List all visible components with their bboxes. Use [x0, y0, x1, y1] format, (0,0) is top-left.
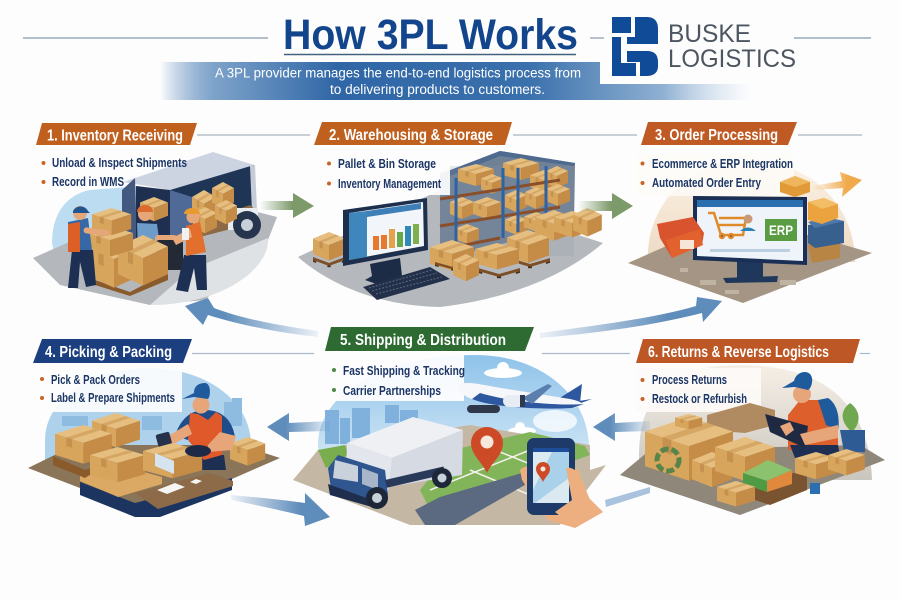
- monitor: [693, 196, 807, 283]
- bullets 2: Pallet & Bin Storage: [338, 157, 436, 171]
- scene background: [52, 186, 140, 290]
- bullets 5: [332, 364, 465, 398]
- arrow: shipping to picking: [267, 413, 330, 441]
- stacked boxes: [780, 176, 844, 263]
- logo wordmark: [668, 20, 796, 73]
- box with scanner label: [143, 443, 202, 478]
- arrow: picking to shipping: [230, 493, 330, 526]
- dome: [648, 160, 855, 262]
- pile of boxes: [645, 414, 865, 507]
- bullets 2: [327, 157, 442, 191]
- sky dome: [318, 355, 589, 470]
- bullets 1: Unload & Inspect Shipments: [52, 156, 187, 170]
- pallets and table: [80, 468, 233, 517]
- pallet stacks: [313, 208, 602, 281]
- city silhouette: [62, 398, 242, 430]
- worker: [765, 372, 840, 458]
- subtitle banner: A 3PL provider manages the end-to-end logistics process from: [215, 66, 581, 80]
- arrow: warehousing to order processing: [578, 193, 633, 219]
- text backing: [36, 368, 182, 412]
- logo mark: [612, 17, 658, 76]
- agent: [740, 214, 756, 231]
- bullets 6: Process Returns: [652, 373, 727, 387]
- worker right: [172, 208, 207, 292]
- title: How 3PL Works: [283, 11, 578, 59]
- bullets 2: Inventory Management: [338, 177, 442, 191]
- arrow: returns to shipping: [593, 413, 650, 441]
- curved arrow: shipping back to receiving: [185, 298, 318, 337]
- heading 3: [641, 122, 797, 145]
- bullets 6: [640, 373, 747, 406]
- floor: [620, 445, 885, 515]
- warehouse floor: [298, 190, 603, 307]
- gloved hand: [185, 445, 211, 457]
- logo: Buske Logistics: [612, 17, 796, 76]
- bullets 3: Ecommerce & ERP Integration: [652, 157, 793, 171]
- heading 4: [33, 339, 192, 363]
- bullets 4: Pick & Pack Orders: [51, 373, 140, 387]
- arrow: faint returns stem: [605, 487, 650, 507]
- heading 3: 3. Order Processing: [655, 127, 778, 144]
- arrow: receiving to warehousing: [260, 193, 314, 218]
- worker behind: [137, 205, 183, 270]
- panel 1: inventory receiving: [33, 152, 277, 305]
- panel 6: returns and reverse logistics: [620, 365, 885, 515]
- floor: [628, 235, 872, 303]
- dome: [45, 368, 251, 470]
- city skyline: [325, 405, 418, 444]
- heading 1: [36, 123, 197, 145]
- warehouse building: [440, 151, 575, 260]
- bullets 3: Automated Order Entry: [652, 176, 761, 190]
- location pin: [471, 427, 503, 473]
- keyboard: [363, 267, 450, 300]
- heading 1: 1. Inventory Receiving: [47, 128, 183, 144]
- worker left: [68, 206, 110, 288]
- dome: [639, 365, 872, 480]
- text backing: [322, 355, 464, 401]
- text backing: [636, 154, 794, 196]
- orange arrow: [812, 172, 862, 197]
- shopping cart: [708, 213, 746, 238]
- bullets 6: Restock or Refurbish: [652, 392, 747, 406]
- truck: [328, 417, 463, 509]
- heading 6: 6. Returns & Reverse Logistics: [648, 344, 829, 361]
- heading 5: 5. Shipping & Distribution: [340, 332, 506, 349]
- logo wordmark: BUSKE: [668, 20, 751, 48]
- heading 5: [325, 327, 534, 351]
- plant: [840, 403, 865, 452]
- truck: [122, 152, 261, 250]
- curved arrow: shipping to order processing: [540, 297, 722, 338]
- phone in hand: [520, 438, 603, 528]
- text backing: [322, 153, 450, 195]
- heading 6: [636, 339, 860, 363]
- heading 2: 2. Warehousing & Storage: [329, 127, 493, 144]
- title rules: [23, 37, 871, 39]
- monitor: [343, 198, 428, 286]
- bullets 5: Fast Shipping & Tracking: [343, 364, 465, 378]
- bullets 4: Label & Prepare Shipments: [51, 391, 175, 405]
- subtitle banner: to delivering products to customers.: [330, 82, 545, 97]
- subtitle banner: [160, 58, 810, 100]
- panel 4: picking and packing: [28, 368, 280, 517]
- back box: [707, 403, 775, 433]
- plane: [458, 383, 592, 413]
- boxes: [53, 413, 265, 482]
- ERP badge: ERP: [769, 222, 793, 238]
- worker: [155, 383, 236, 470]
- panel 2: warehousing and storage: [298, 151, 603, 307]
- panel 3: order processing: [628, 154, 872, 303]
- bullets 4: [40, 373, 175, 405]
- bullets 1: [42, 156, 187, 189]
- panel 5: shipping and distribution: [293, 355, 606, 528]
- envelopes: [657, 217, 704, 258]
- clouds: [484, 362, 577, 435]
- bullets 5: Carrier Partnerships: [343, 384, 441, 398]
- ground: [293, 425, 606, 525]
- pallet stack: [87, 208, 168, 296]
- heading 2: [314, 122, 512, 145]
- logo wordmark: LOGISTICS: [668, 45, 796, 73]
- heading 4: 4. Picking & Packing: [45, 344, 172, 361]
- bullets 3: [640, 157, 793, 190]
- bullets 1: Record in WMS: [52, 175, 124, 189]
- text backing: [636, 368, 761, 412]
- floor: [28, 445, 280, 515]
